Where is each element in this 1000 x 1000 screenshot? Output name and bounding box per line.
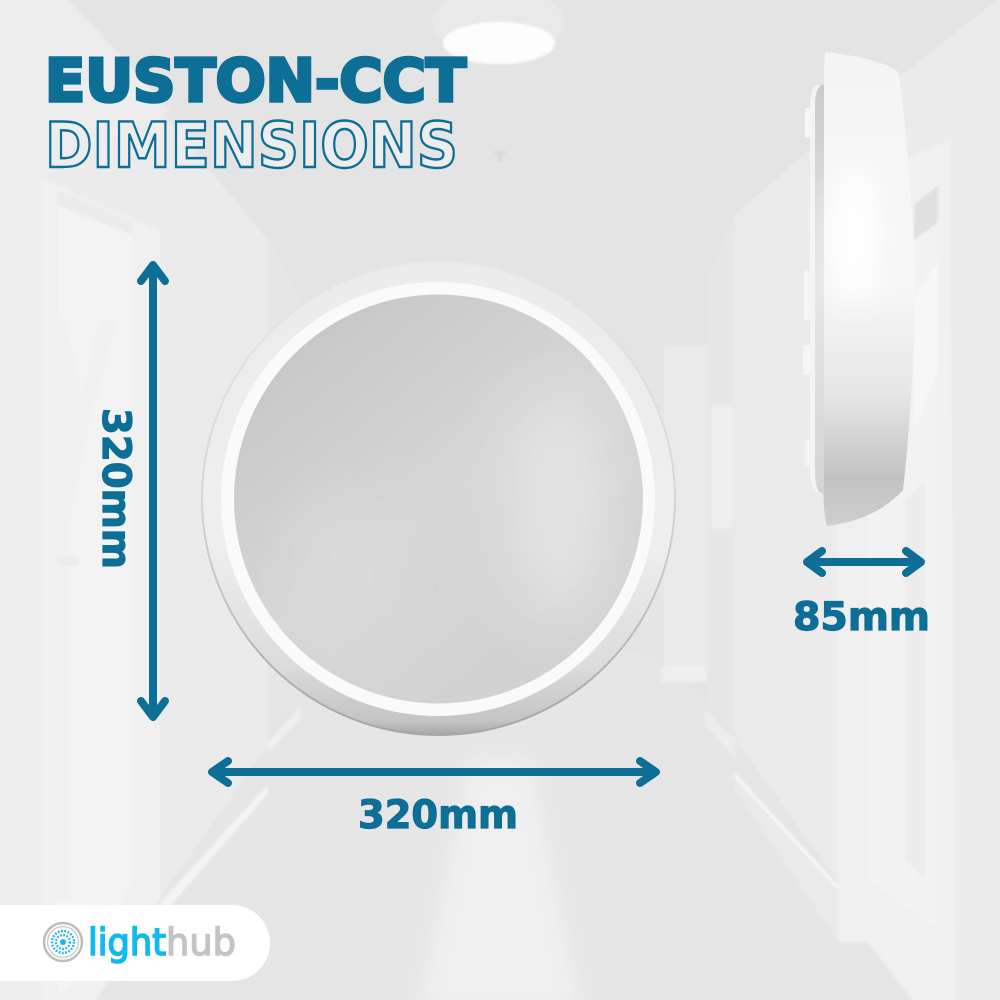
- depth arrow: [807, 551, 921, 573]
- housing: [824, 52, 915, 526]
- far picture frame: [712, 405, 733, 528]
- title: [45, 46, 466, 182]
- ceiling light: [432, 0, 564, 64]
- title line: EUSTON-CCT: EUSTON-CCT: [45, 46, 466, 115]
- logo wordmark: [88, 921, 236, 964]
- skirting boards: [160, 785, 268, 908]
- left door: [42, 178, 160, 1000]
- ceiling sprinkler: [492, 151, 508, 162]
- light side view: [803, 52, 915, 526]
- width arrow: [212, 761, 656, 783]
- logo wordmark: light: [88, 921, 166, 964]
- width label: 320mm: [358, 793, 518, 838]
- height arrow: [141, 265, 165, 717]
- title line: DIMENSIONS: DIMENSIONS: [45, 109, 458, 182]
- light front view: [202, 262, 675, 735]
- mounting base: [803, 85, 826, 494]
- right door: [838, 140, 955, 1000]
- logo wordmark: hub: [166, 921, 236, 964]
- height label: 320mm: [93, 408, 138, 569]
- depth label: 85mm: [793, 595, 930, 640]
- icon: lighthub logo mark: [44, 923, 82, 961]
- logo badge: [0, 905, 270, 981]
- floor: [80, 650, 930, 1000]
